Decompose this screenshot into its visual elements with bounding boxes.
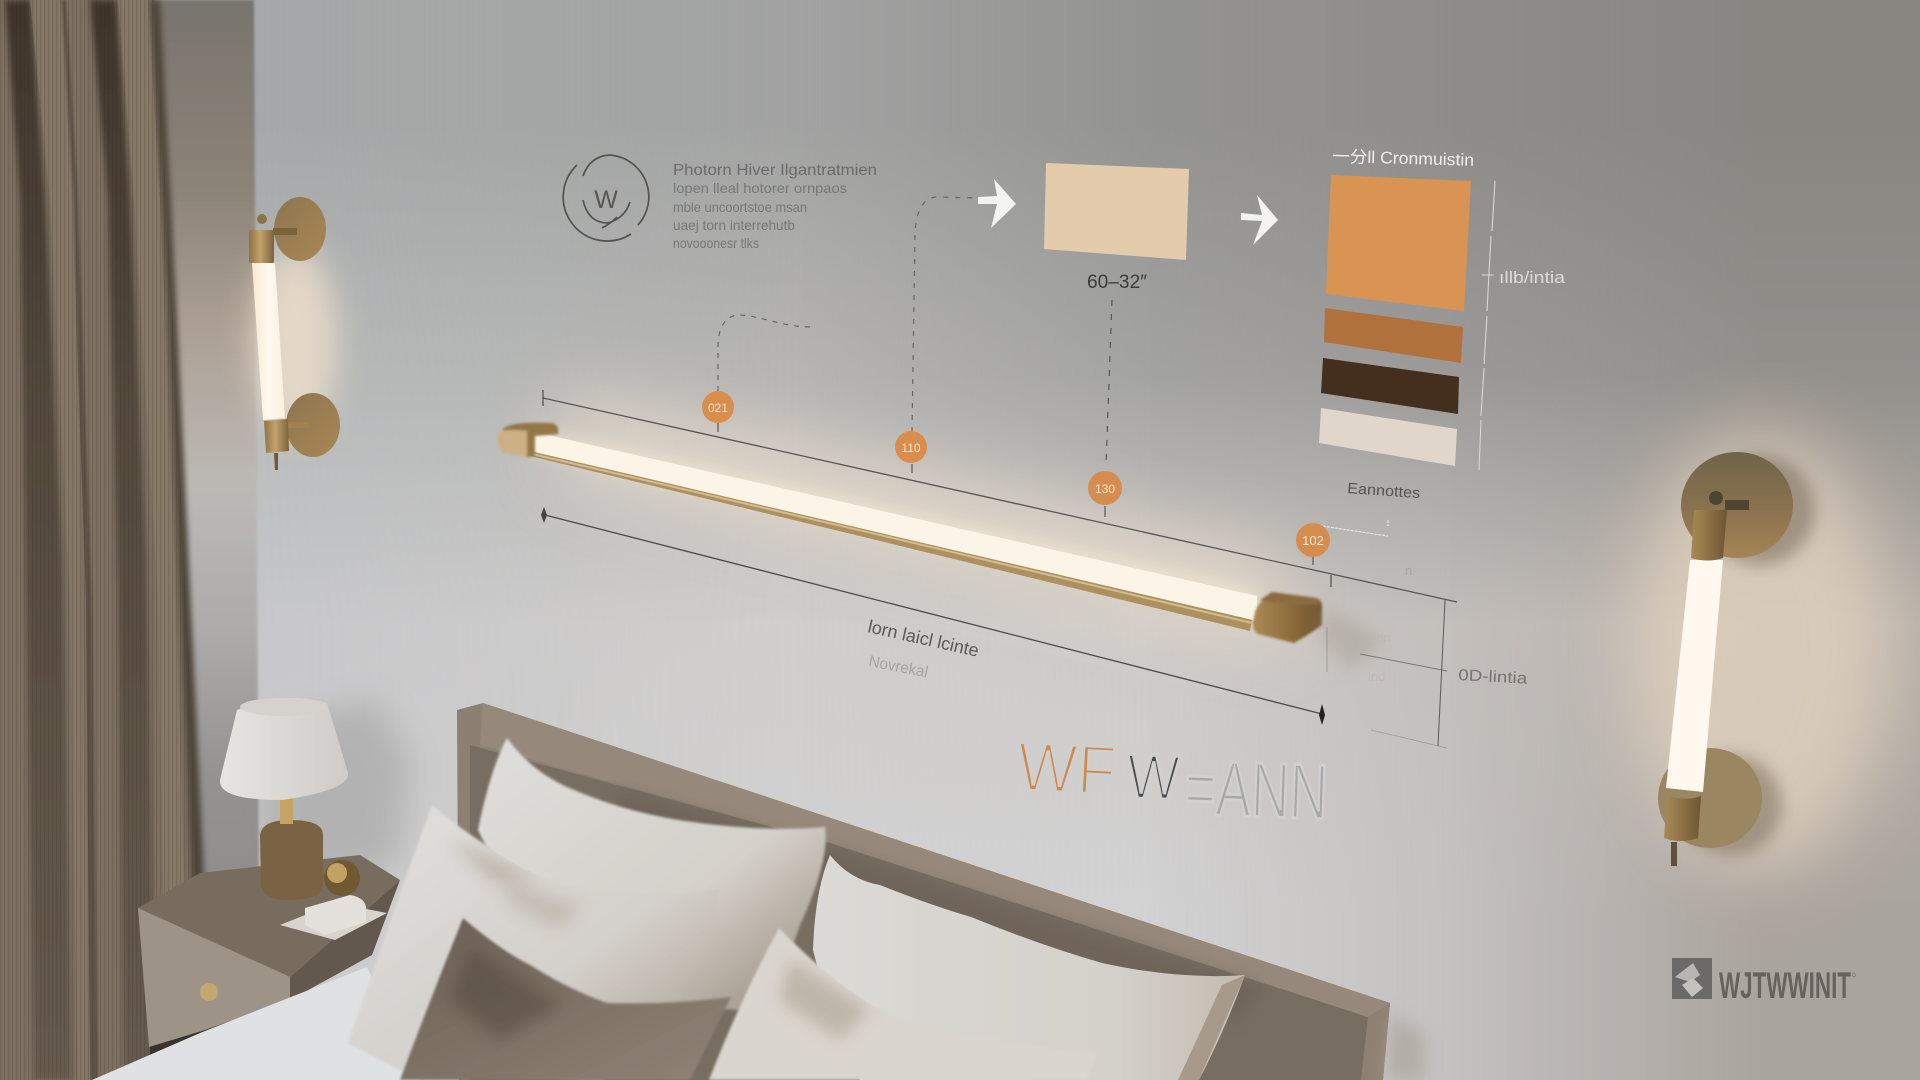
logo trademark	[1852, 973, 1856, 977]
marker 4	[1296, 523, 1330, 557]
marker 1: 021	[708, 401, 728, 415]
headboard	[457, 703, 1390, 1080]
sconce top collar	[1691, 510, 1727, 560]
dimension line: bottom	[541, 507, 1325, 725]
sconce arm	[1725, 500, 1749, 510]
sconce top plate	[1681, 452, 1793, 558]
sconce bottom plate	[1658, 748, 1762, 848]
nightstand front	[138, 908, 290, 1047]
brand letters: WF: WF	[1015, 727, 1118, 810]
sconce bottom plate	[286, 393, 340, 457]
marker 2: 110	[901, 441, 921, 455]
faint labels: n	[1405, 563, 1412, 578]
bed sheets	[92, 967, 420, 1080]
right end cap	[1253, 592, 1322, 643]
sconce pin	[1671, 842, 1677, 866]
drawer knob	[200, 983, 218, 1001]
pillow: front middle	[708, 928, 878, 1080]
nightstand top	[138, 855, 400, 977]
logo square	[1672, 958, 1712, 999]
table lamp	[220, 698, 348, 900]
palette heading: 一分ll Cronmuistin	[1332, 147, 1474, 170]
marker 1	[702, 391, 734, 423]
brass sphere	[324, 860, 360, 896]
description text block: Photorn Hiver Ilgantratmien	[673, 162, 877, 179]
marker 4: 102	[1302, 533, 1324, 548]
faint labels	[1368, 563, 1412, 684]
arrow 1	[978, 179, 1016, 228]
sconce top plate	[274, 197, 326, 261]
description text block: novooonesr tlks	[673, 235, 759, 251]
dashed leader to marker 3	[1106, 300, 1112, 467]
marker 2	[895, 431, 927, 463]
sconce shadow	[1705, 455, 1815, 565]
glow around tube	[530, 428, 1257, 620]
logo diamond	[1675, 963, 1700, 982]
nightstand side	[290, 880, 400, 1000]
lamp shade opening	[240, 698, 324, 716]
wall glow: linear light	[560, 395, 1290, 640]
faint labels: 1on	[1369, 630, 1391, 645]
linear wall light	[498, 423, 1322, 643]
description text block	[673, 162, 877, 251]
sconce tube	[252, 263, 285, 420]
lamp shadow on wall	[262, 700, 410, 880]
sconce bottom shadow	[1682, 755, 1782, 855]
rail highlight	[528, 452, 1252, 624]
curtain	[0, 0, 214, 1080]
palette bracket line	[1479, 181, 1495, 470]
cream swatch size label: 60–32″	[1087, 272, 1147, 293]
bottom right brand logo	[1672, 958, 1856, 1006]
marker 3	[1088, 471, 1122, 505]
right wall sconce	[1658, 452, 1815, 866]
brass rail	[528, 449, 1252, 631]
pillow: back left	[478, 738, 826, 1010]
cream swatch	[1044, 163, 1189, 260]
palette: light swatch	[1319, 408, 1457, 466]
sconce tube	[1666, 560, 1723, 792]
leader ticks below markers	[718, 423, 1313, 565]
description text block: uaej torn interrehutb	[673, 217, 795, 233]
description text block: mble uncoortstoe msan	[673, 199, 807, 215]
sconce top arm	[273, 228, 297, 235]
circular W logo: W	[594, 186, 618, 214]
side wall	[150, 0, 260, 1080]
sconce finial	[257, 214, 267, 224]
sconce top collar	[249, 230, 274, 263]
logo diamond lower	[1682, 978, 1703, 997]
wall shadow right of headboard	[1385, 1012, 1425, 1080]
palette: orange swatch	[1326, 175, 1471, 311]
pillow: brown	[400, 918, 731, 1080]
lamp stem	[280, 798, 293, 824]
length sublabel: Novrekal	[867, 653, 929, 681]
dimension lines: right bracket	[1327, 600, 1447, 748]
palette: dark swatch	[1321, 358, 1459, 414]
nightstand	[138, 855, 400, 1060]
faint labels: lnd	[1368, 669, 1385, 684]
dimension line: top	[543, 390, 1457, 602]
left wall sconce	[249, 197, 340, 470]
lamp shade	[220, 698, 348, 800]
brand letters: faded: =ANN	[1183, 743, 1329, 836]
glowing tube	[530, 431, 1257, 621]
sconce finial	[1709, 491, 1723, 505]
dashed leader to marker 1	[718, 315, 813, 391]
pillow: front left	[348, 806, 640, 1080]
sconce pin	[274, 453, 278, 470]
arrow 2	[1241, 195, 1278, 245]
wall glow: right sconce	[1630, 430, 1890, 870]
sconce bottom arm	[287, 422, 309, 428]
description text block: lopen lleal hotorer ornpaos	[673, 180, 847, 196]
brand lettering	[1015, 727, 1329, 836]
palette bracket label: ıllb/intia	[1499, 268, 1566, 287]
books	[280, 895, 387, 940]
left end cap	[498, 423, 558, 457]
shadow of right cap	[1322, 605, 1385, 670]
height label: 0D-lintia	[1458, 667, 1528, 688]
pillow: back right	[813, 855, 1245, 1080]
length label: lorn laicl lcinte	[866, 616, 981, 661]
circular W logo	[563, 155, 649, 241]
lamp base	[260, 820, 323, 900]
sconce bottom collar	[264, 419, 289, 453]
sconce bottom collar	[1664, 795, 1701, 841]
palette: brown swatch	[1324, 308, 1463, 363]
leader to marker 4	[1315, 520, 1388, 536]
palette caption: Eannottes	[1347, 480, 1421, 502]
brand letters: W: W	[1126, 740, 1182, 814]
dashed leader to marker 2	[912, 197, 978, 432]
wall glow: left sconce	[253, 245, 337, 435]
marker 3: 130	[1095, 482, 1115, 496]
